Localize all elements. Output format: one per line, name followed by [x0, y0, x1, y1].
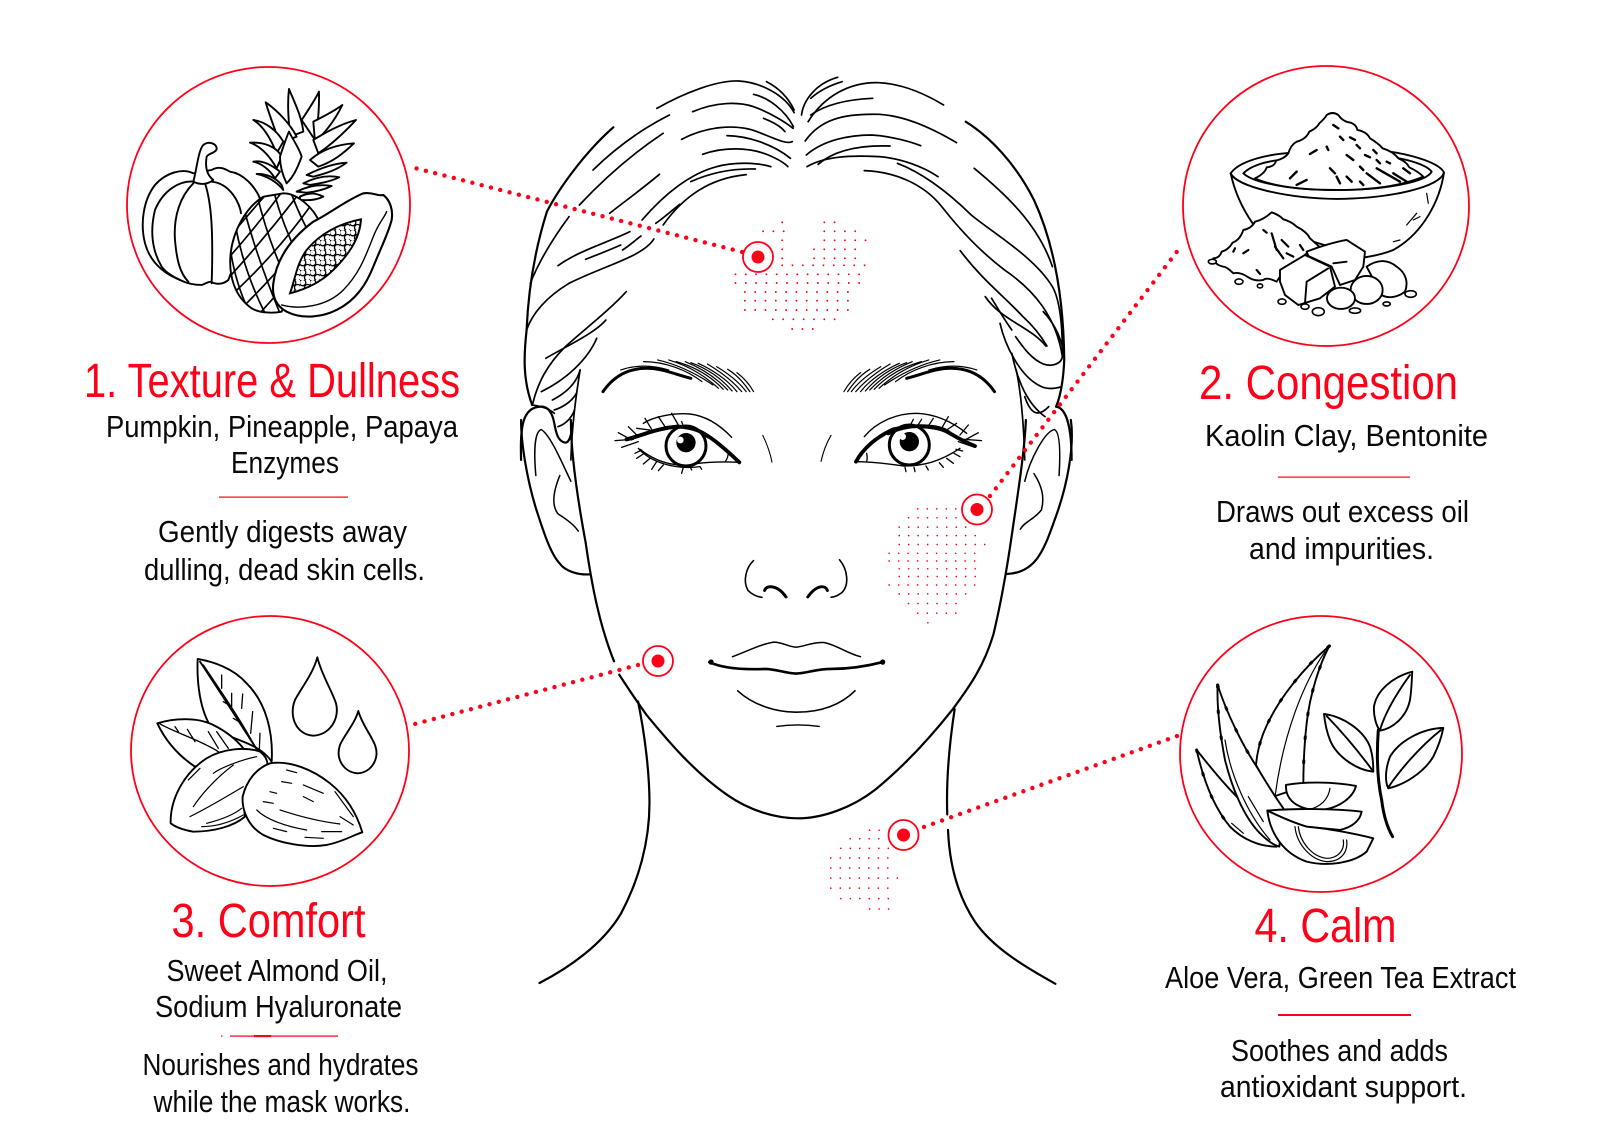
description: Gently digests away — [158, 514, 407, 549]
heading: 2. Congestion — [1199, 357, 1458, 410]
target marker 1 — [743, 242, 773, 272]
heading: 3. Comfort — [172, 895, 366, 948]
description — [1220, 1033, 1467, 1104]
face outline, ears, neck, nose and mouth — [521, 420, 1072, 984]
icon: clay bowl and rocks — [1183, 66, 1469, 346]
description — [1216, 494, 1469, 566]
dotted leader line 2 — [990, 245, 1182, 496]
ingredients: Enzymes — [231, 445, 339, 480]
eye left — [615, 413, 739, 473]
description: Draws out excess oil — [1216, 494, 1469, 529]
dotted leader line 1 — [411, 167, 742, 252]
halftone: neck — [831, 830, 899, 909]
panel: calm — [1165, 616, 1516, 1104]
dotted leader line 4 — [924, 736, 1177, 827]
icon: aloe vera and green tea — [1180, 616, 1462, 892]
face illustration — [521, 77, 1072, 984]
target marker 2 — [962, 494, 992, 524]
divider with thick section — [221, 1035, 338, 1037]
eyebrow right — [844, 360, 994, 392]
ingredients: Sodium Hyaluronate — [155, 989, 402, 1024]
halftone: forehead — [736, 222, 867, 329]
ears upper — [521, 407, 1072, 460]
target marker 4 — [888, 820, 918, 850]
description: Nourishes and hydrates — [142, 1047, 418, 1082]
eyebrow left — [603, 360, 754, 392]
ingredients: Kaolin Clay, Bentonite — [1205, 418, 1488, 453]
panel: congestion — [1183, 66, 1488, 566]
description: and impurities. — [1249, 531, 1434, 566]
panel: texture and dullness — [84, 67, 460, 587]
description — [142, 1047, 418, 1119]
description: while the mask works. — [153, 1084, 411, 1119]
description: antioxidant support. — [1220, 1069, 1467, 1104]
target marker 3 — [643, 646, 673, 676]
eye right — [856, 413, 982, 472]
description — [144, 514, 425, 587]
heading: 4. Calm — [1254, 900, 1396, 953]
ingredients: Pumpkin, Pineapple, Papaya — [106, 409, 459, 444]
ingredients: Aloe Vera, Green Tea Extract — [1165, 960, 1516, 995]
ingredients — [106, 409, 459, 480]
panel: comfort — [131, 616, 418, 1119]
icon: pumpkin, pineapple, papaya — [127, 67, 410, 343]
description: dulling, dead skin cells. — [144, 552, 425, 587]
icon: almonds, leaves and drops — [131, 616, 409, 886]
hair — [525, 77, 1064, 460]
halftone: cheek — [889, 509, 986, 623]
ingredients — [155, 953, 402, 1024]
heading: 1. Texture & Dullness — [84, 355, 460, 408]
ingredients: Sweet Almond Oil, — [166, 953, 388, 988]
dotted leader line 3 — [411, 665, 638, 725]
description: Soothes and adds — [1231, 1033, 1448, 1068]
